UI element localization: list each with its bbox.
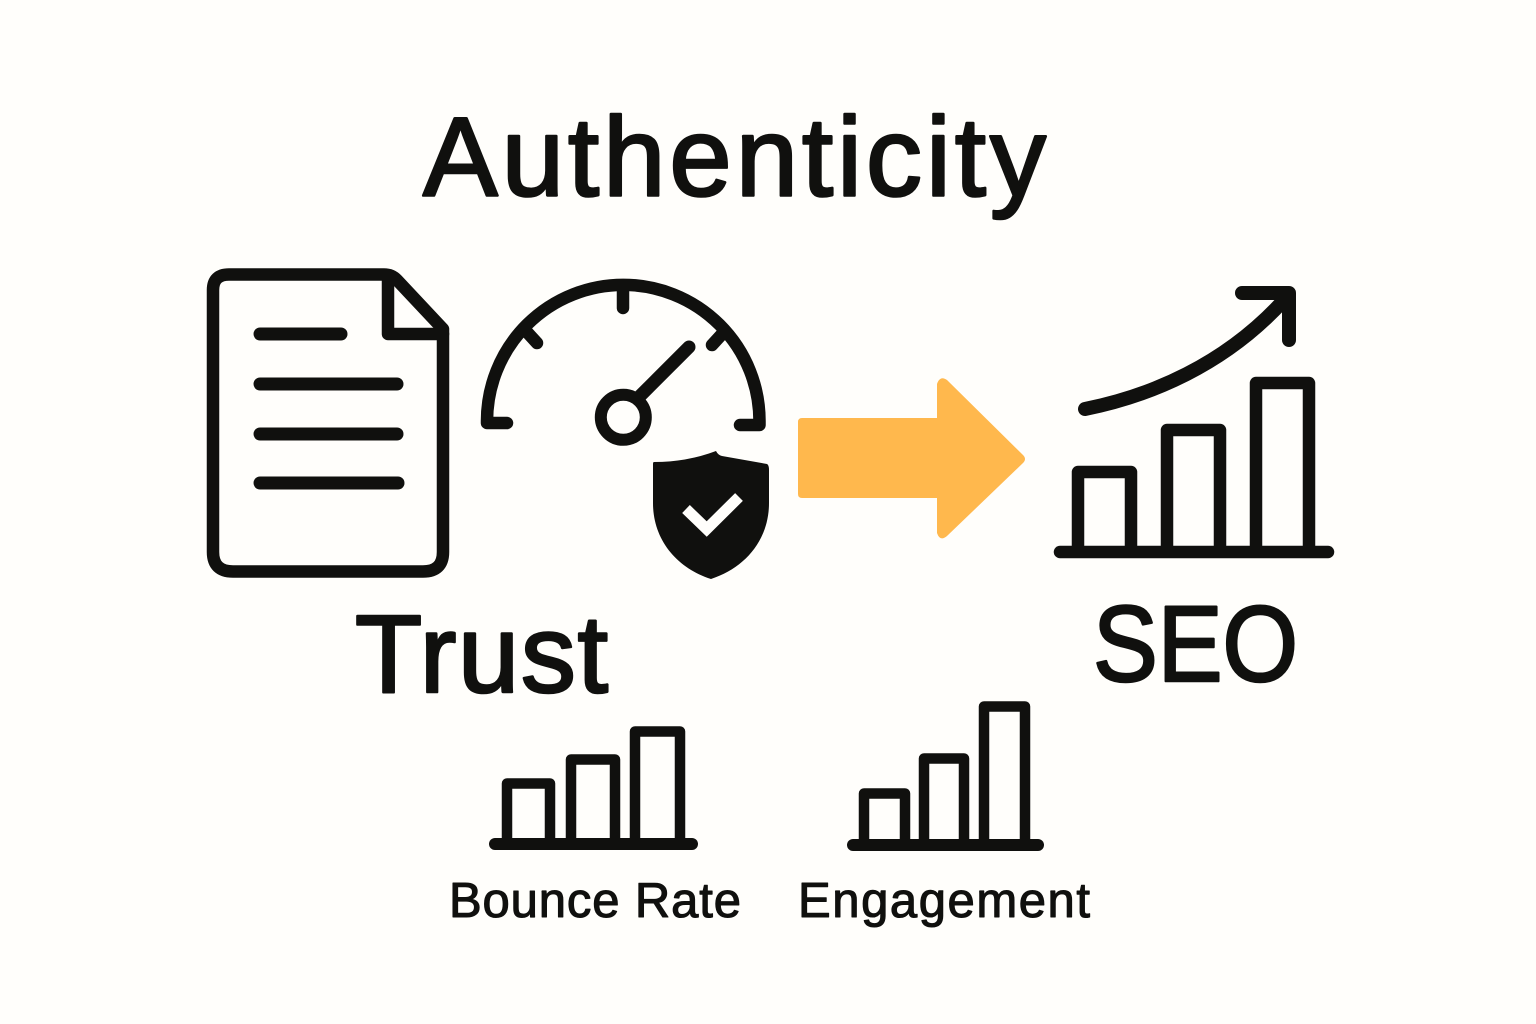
icon: document: [213, 274, 443, 572]
bars: [1078, 472, 1131, 550]
rising trend arrow: [1085, 293, 1289, 409]
icon: bounce rate bar chart: [495, 732, 692, 844]
baseline: [1060, 546, 1328, 558]
arrow: orange right arrow: [798, 378, 1025, 538]
icon: SEO growth bar chart with rising arrow: [1060, 293, 1328, 552]
title: Authenticity: Authenticity: [423, 94, 1046, 220]
label: Trust: Trust: [355, 593, 608, 716]
icon: engagement bar chart: [853, 706, 1038, 845]
icon: shield with check mark: [653, 451, 769, 579]
label: Engagement: Engagement: [798, 874, 1090, 928]
document text lines: [260, 334, 398, 483]
label: Bounce Rate: Bounce Rate: [449, 874, 741, 928]
icon: speedometer gauge: [487, 285, 760, 440]
label: SEO: SEO: [1093, 583, 1298, 704]
